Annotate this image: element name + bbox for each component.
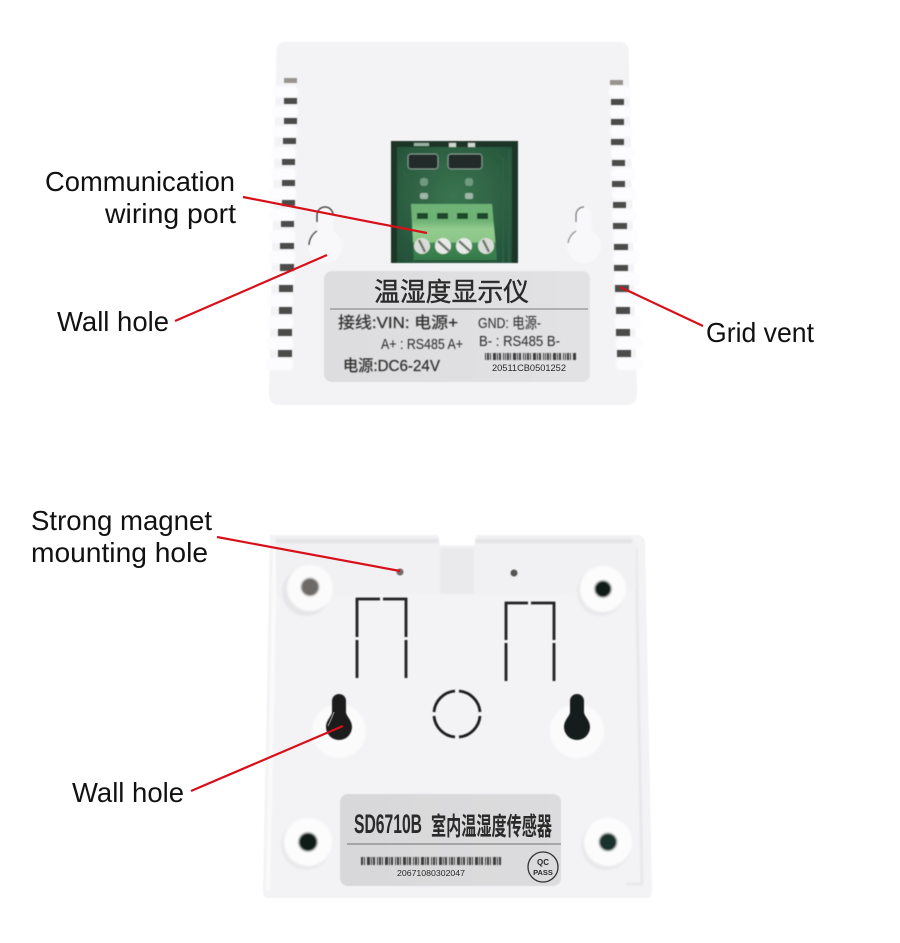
wiring text: 电源:DC6-24V: [343, 357, 440, 375]
product name: 室内温湿度传感器: [431, 812, 552, 841]
label: grid vent: Grid vent: [706, 317, 814, 348]
QC pass stamp: PASS: [533, 868, 553, 877]
grid vents: right column: [610, 80, 631, 357]
wiring text: B- : RS485 B-: [479, 333, 560, 350]
wiring text: 接线:VIN: 电源+: [338, 314, 458, 332]
icon: left keyhole wall hole: [312, 694, 366, 758]
label: strong magnet mounting hole: mounting hole: [31, 537, 208, 568]
wiring text: A+ : RS485 A+: [381, 336, 463, 353]
screw post: top left: [282, 565, 333, 616]
small components: [414, 143, 475, 199]
label: top wall hole: Wall hole: [57, 306, 169, 337]
screw post: bottom left: [281, 818, 332, 870]
label: communication wiring port: [45, 166, 236, 229]
green screw terminal block: [411, 204, 497, 260]
arrow: communication wiring port: [243, 197, 427, 233]
label title: 温湿度显示仪: [374, 277, 529, 307]
wiring text: GND: 电源-: [478, 315, 541, 332]
label: strong magnet mounting hole: [31, 505, 212, 568]
chip: right relay: [448, 154, 482, 169]
arrow: strong magnet mounting hole: [217, 537, 400, 571]
icon: right keyhole wall hole: [567, 207, 601, 263]
screw post: top right: [577, 566, 626, 616]
QC pass stamp: [528, 852, 558, 882]
rectangular slot: left: [357, 599, 406, 678]
magnet mounting holes: [396, 568, 518, 576]
arrow: top wall hole: [175, 255, 327, 321]
vent ribs: left: [266, 86, 298, 370]
rectangular slot: right: [506, 603, 554, 681]
product label: sensor: [340, 794, 561, 886]
icon: right keyhole wall hole: [550, 694, 604, 758]
barcode: [485, 353, 577, 360]
QC pass stamp: QC: [537, 858, 549, 867]
wiring text: [338, 314, 560, 375]
chip: left relay: [408, 154, 438, 169]
icon: left keyhole wall hole: [308, 207, 342, 263]
screw post: bottom right: [581, 818, 632, 870]
product label: display: [324, 271, 590, 382]
panel: bottom device base view: [263, 535, 652, 898]
model number: SD6710B: [354, 809, 422, 839]
serial number: 20511CB0501252: [492, 363, 566, 374]
label: communication wiring port: wiring port: [104, 198, 236, 229]
serial number: 20671080302047: [397, 868, 465, 878]
mounting block: right: [475, 536, 636, 595]
mounting block: left: [275, 536, 439, 596]
icon: knockout circle: [434, 691, 480, 737]
label: bottom wall hole: Wall hole: [72, 777, 184, 808]
arrow: bottom wall hole: [191, 726, 343, 791]
label: communication wiring port: Communication: [45, 166, 235, 197]
panel: top device rear view: [266, 42, 642, 405]
barcode: [361, 857, 503, 865]
arrow: grid vent: [620, 287, 703, 326]
terminal window with circuit board: [391, 141, 518, 263]
vent ribs: right: [609, 86, 642, 370]
label: strong magnet mounting hole: Strong magnet: [31, 505, 212, 536]
grid vents: left column: [278, 78, 297, 357]
